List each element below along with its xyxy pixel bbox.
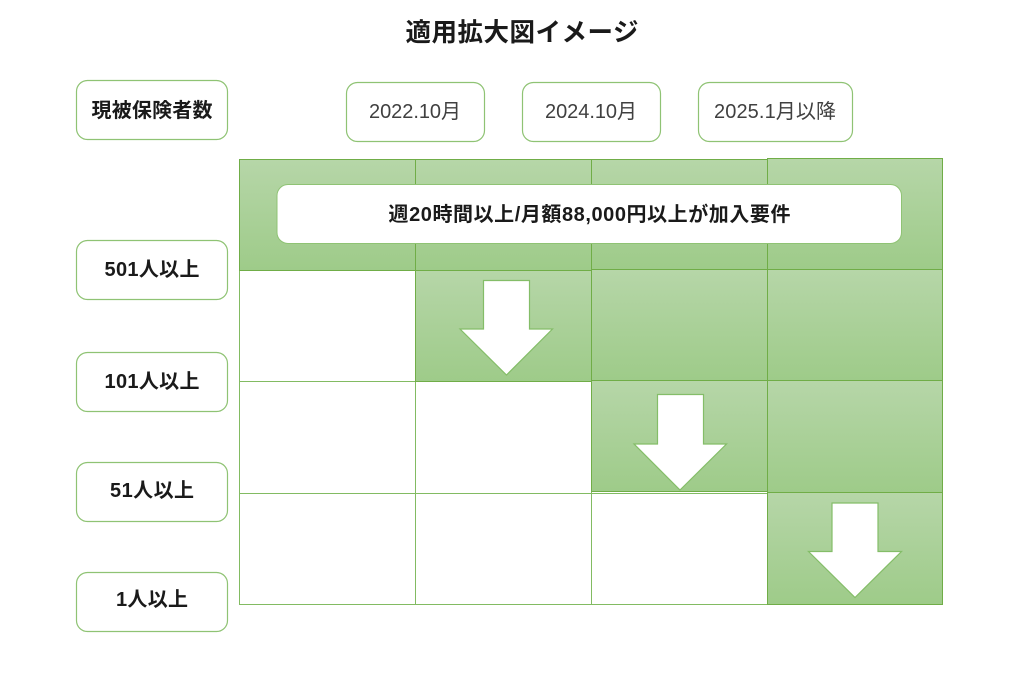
period label: 2025.1月以降: 2025.1月以降	[714, 100, 836, 123]
row header: 現被保険者数: 現被保険者数	[92, 99, 212, 122]
period label: 2024.10月	[522, 82, 660, 142]
size label: 1人以上	[76, 572, 228, 632]
period label: 2024.10月: 2024.10月	[545, 101, 637, 123]
arrow: 101人以上 in 2022.10	[460, 280, 552, 375]
size label: 51人以上: 51人以上	[110, 479, 194, 502]
period label: 2022.10月: 2022.10月	[369, 101, 461, 123]
size label: 501人以上	[76, 240, 228, 300]
requirement banner: 週20時間以上/月額88,000円以上が加入要件	[388, 202, 790, 226]
arrow: 51人以上 in 2024.10	[634, 394, 726, 490]
period label: 2022.10月	[346, 82, 484, 142]
timeline grid	[240, 158, 942, 604]
requirement banner	[277, 184, 902, 244]
size label: 101人以上: 101人以上	[104, 370, 200, 393]
size label: 1人以上: 1人以上	[116, 588, 188, 611]
size label: 51人以上	[76, 462, 228, 522]
row header: 現被保険者数	[76, 80, 228, 140]
size label: 501人以上: 501人以上	[104, 258, 200, 281]
arrow: 1人以上 in 2025.1	[808, 503, 902, 598]
title: 適用拡大図イメージ	[406, 19, 638, 47]
size label: 101人以上	[76, 352, 228, 412]
period label: 2025.1月以降	[698, 82, 852, 142]
